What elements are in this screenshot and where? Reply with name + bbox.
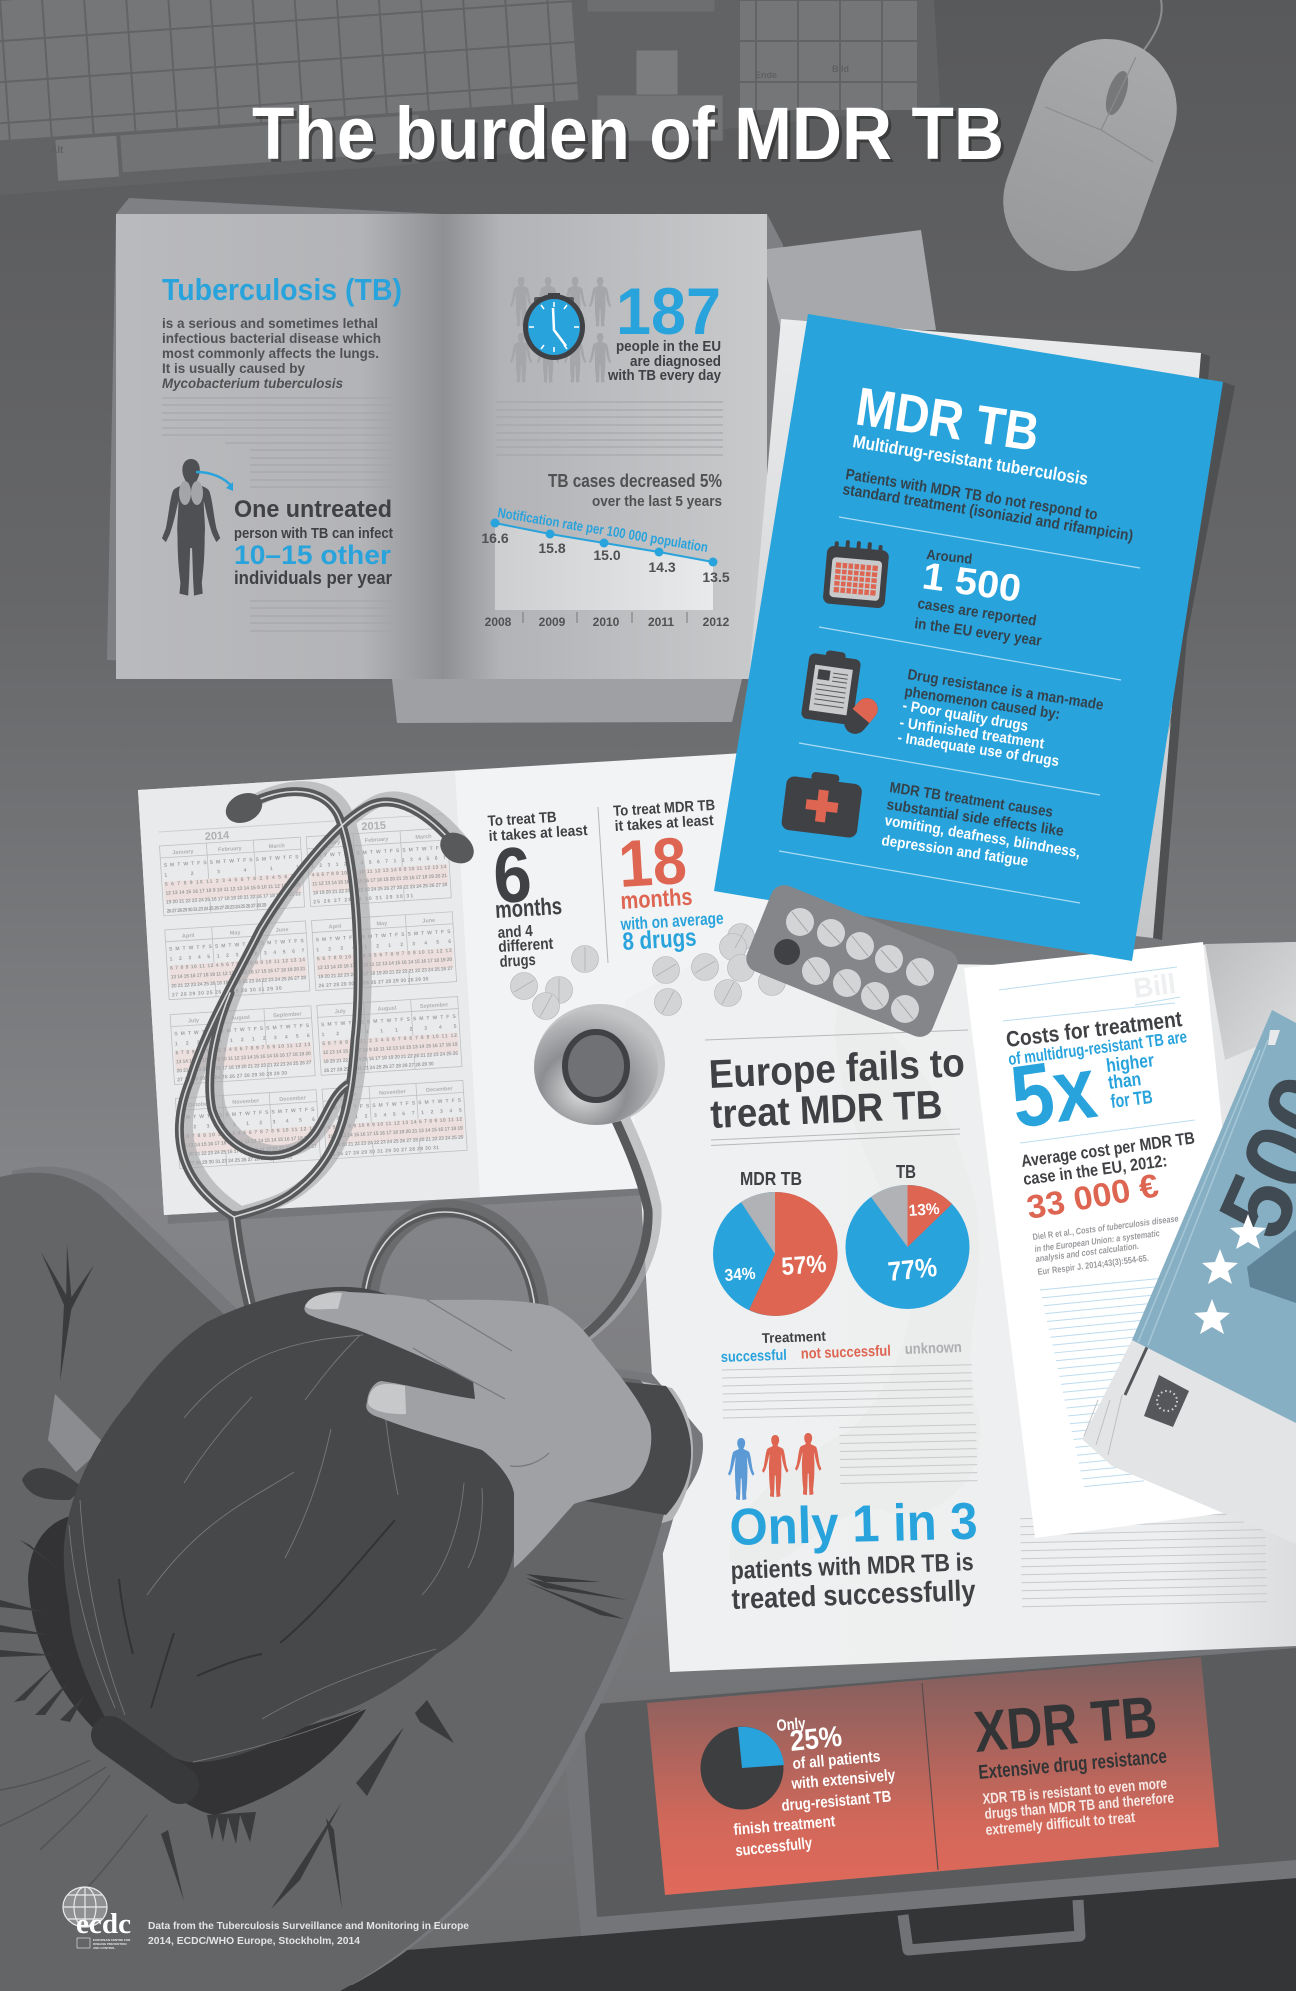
- data source footer: [148, 1920, 469, 1947]
- TB treatment duration: To treat TB: [487, 809, 557, 830]
- calendar 2014 and 2015: 4 5 6 7 8 9 10 8 9 10 11 12 13 14 8 9 10 11 12 13 14: [311, 864, 447, 878]
- pie chart: TB outcomes: 77%: [886, 1252, 938, 1287]
- pie chart: MDR TB outcomes: 34%: [724, 1264, 756, 1285]
- calendar 2014 and 2015: October: [335, 1092, 357, 1099]
- calendar 2014 and 2015: 26 27 28 29 30 31 23 24 25 26 27 28 23 24 25 26 27 28 29: [166, 902, 267, 915]
- 1 500 cases: Around: [926, 546, 973, 567]
- average cost: 33 000 €: [1024, 1166, 1161, 1226]
- one untreated callout: One untreated: [234, 496, 392, 523]
- euro banknotes: [1082, 1010, 1296, 1544]
- ECDC logo: ecdc: [76, 1909, 131, 1940]
- pie legend: Treatment: [762, 1328, 826, 1346]
- calendar 2014 and 2015: 4 5 6 7 8 9 10 8 9 10 11 12 13 14 6 7 8 9 10 11 12: [327, 1117, 463, 1131]
- calendar 2014 and 2015: 26 27 28 29 30 24 25 26 27 28 29 30 28 29 30: [318, 976, 429, 989]
- calendar 2014 and 2015: 19 20 21 22 23 24 25 17 18 19 20 21 22 23 21 22 23 24 25 26 27: [318, 966, 453, 980]
- sleeve cuff: [574, 1381, 691, 1515]
- person leaning over desk: [0, 1167, 703, 1991]
- calendar 2014 and 2015: S M T W T F S S M T W T F S S M T W T F S: [326, 1098, 462, 1112]
- icon: clipboard and pill: [801, 648, 882, 738]
- fingernails: [305, 1293, 406, 1414]
- data source footer: 2014, ECDC/WHO Europe, Stockholm, 2014: [148, 1935, 360, 1947]
- calendar 2014 and 2015: December: [426, 1086, 454, 1094]
- keyboard: [0, 0, 940, 195]
- calendar 2014 and 2015: April: [182, 933, 195, 940]
- XDR description: [982, 1775, 1175, 1839]
- pie chart: TB outcomes: TB: [896, 1162, 916, 1182]
- calendar 2014 and 2015: 20 21 22 23 24 25 26 17 18 19 20 21 22 23 21 22 23 24 25 26 27: [176, 1060, 312, 1074]
- 1 500 cases: in the EU every year: [913, 615, 1043, 650]
- calendar 2014 and 2015: 5 6 7 8 9 10 11 2 3 4 5 6 7 8 2 3 4 5 6 7 8: [165, 873, 300, 888]
- XDR 25 percent text: finish treatment: [733, 1813, 837, 1839]
- calendar 2014 and 2015: November: [379, 1089, 407, 1097]
- line chart: notification rate: 15.0: [593, 547, 621, 563]
- people icons: [510, 277, 611, 383]
- panel: XDR TB: [647, 1657, 1219, 1895]
- XDR 25 percent text: 25%: [788, 1721, 844, 1758]
- ECDC logo: EUROPEAN CENTRE FOR: [93, 1938, 131, 1942]
- calendar 2014 and 2015: 19 20 21 22 23 24 25 16 17 18 19 20 21 22 21 22 23 24 25 26 27: [182, 1144, 317, 1158]
- MDR TB treatment duration: To treat MDR TB: [613, 797, 716, 820]
- TB cases decreased heading: over the last 5 years: [592, 493, 722, 510]
- logo globe: [63, 1887, 107, 1927]
- side effects: vomiting, deafness, blindness,: [883, 812, 1081, 861]
- calendar 2014 and 2015: 25 26 27 28 29 30 31 29 30 31: [313, 893, 414, 905]
- costs heading: Costs for treatment: [1005, 1006, 1184, 1052]
- calendar 2014 and 2015: 1 2 3 1 2 3 4 5 6 7 1 2 3 4 5: [327, 1108, 462, 1122]
- keyboard: Alt: [50, 145, 64, 156]
- line chart: notification rate: 2011: [648, 615, 674, 629]
- icon: loose pills: [510, 924, 786, 1020]
- drug resistance causes: - Inadequate use of drugs: [896, 729, 1060, 770]
- calendar 2014 and 2015: March: [268, 843, 286, 850]
- tuberculosis description: [162, 315, 381, 391]
- pie legend: unknown: [905, 1339, 962, 1358]
- calendar 2014 and 2015: 5 6 7 8 9 10 11 2 3 4 5 6 7 8 7 8 9 10 11 12 13: [181, 1126, 316, 1140]
- calendar 2014 and 2015: June: [275, 927, 289, 934]
- data source footer: Data from the Tuberculosis Surveillance and Monitoring in Europe: [148, 1920, 469, 1932]
- tuberculosis description: Mycobacterium tuberculosis: [162, 375, 343, 391]
- ECDC logo: [63, 1887, 131, 1950]
- calendar 2014 and 2015: October: [188, 1101, 210, 1109]
- calendar 2014 and 2015: September: [273, 1011, 303, 1019]
- panel: costs bill: Bill: [1132, 968, 1177, 1004]
- MDR TB treatment duration: [613, 797, 724, 956]
- calendar 2014 and 2015: August: [378, 1005, 397, 1013]
- XDR subtitle: Extensive drug resistance: [978, 1746, 1168, 1784]
- TB treatment duration: different: [498, 936, 554, 956]
- pie chart: MDR TB outcomes: 57%: [780, 1250, 827, 1281]
- calendar 2014 and 2015: 6 7 8 9 10 11 12 4 5 6 7 8 9 10 8 9 10 11 12 13 14: [170, 957, 305, 972]
- 187 statistic: [607, 274, 722, 384]
- computer mouse: [984, 0, 1196, 291]
- XDR 25 percent text: [733, 1716, 896, 1860]
- side effects: depression and fatigue: [880, 832, 1029, 870]
- citation: in the European Union: a systematic: [1034, 1228, 1160, 1254]
- keyboard: Ende: [755, 70, 777, 80]
- tuberculosis description: most commonly affects the lungs.: [162, 345, 379, 361]
- pie chart: TB outcomes: 13%: [908, 1201, 940, 1220]
- calendar 2014 and 2015: June: [422, 918, 435, 925]
- calendar 2014 and 2015: May: [376, 921, 388, 928]
- calendar 2014 and 2015: 5 6 7 8 9 10 11 3 4 5 6 7 8 9 7 8 9 10 11 12 13: [317, 948, 452, 962]
- calendar 2014 and 2015: 19 20 21 22 23 24 25 16 17 18 19 20 21 22 20 21 22 23 24 25 26: [323, 1051, 459, 1065]
- line chart: notification rate: 2010: [593, 615, 620, 629]
- calendar 2014 and 2015: November: [232, 1098, 260, 1106]
- calendar 2014 and 2015: April: [328, 924, 342, 931]
- XDR description: XDR TB is resistant to even more: [982, 1775, 1168, 1808]
- drug resistance causes: Drug resistance is a man-made: [906, 666, 1105, 714]
- calendar 2014 and 2015: S M T W T F S S M T W T F S S M T W T F S: [169, 938, 305, 953]
- only 1 in 3 callout: patients with MDR TB is: [730, 1548, 974, 1585]
- TB cases decreased heading: [548, 471, 722, 510]
- MDR description: standard treatment (isoniazid and rifampicin): [841, 481, 1134, 545]
- calendar 2014 and 2015: S M T W T F S S M T W T F S S M T W T F S: [164, 854, 299, 869]
- average cost: case in the EU, 2012:: [1022, 1151, 1168, 1189]
- Europe heading: treat MDR TB: [709, 1083, 943, 1137]
- pie chart: 25% finish treatment: [700, 1726, 784, 1810]
- calendar 2014 and 2015: S M T W T F S S M T W T F S S M T W T F S: [321, 1014, 457, 1028]
- average cost: Average cost per MDR TB: [1020, 1128, 1196, 1171]
- keyboard: Bild: [832, 64, 849, 74]
- line chart: notification rate: 2012: [703, 615, 730, 629]
- 187 statistic: with TB every day: [607, 367, 722, 384]
- line chart: notification rate: 13.5: [702, 569, 730, 585]
- average cost: [1020, 1128, 1196, 1226]
- calendar 2014 and 2015: 12 13 14 15 16 17 18 9 10 11 12 13 14 15 9 10 11 12 13 14 15: [165, 882, 301, 897]
- tuberculosis description: It is usually caused by: [162, 360, 305, 376]
- XDR description: drugs than MDR TB and therefore: [984, 1789, 1175, 1823]
- calendar 2014 and 2015: 11 12 13 14 15 16 17 15 16 17 18 19 20 21 15 16 17 18 19 20 21: [312, 873, 447, 887]
- only 1 in 3 callout: treated successfully: [731, 1575, 976, 1616]
- calendar 2014 and 2015: [159, 814, 467, 1168]
- calendar 2014 and 2015: 25 26 27 28 29 30 31 29 30 27 28 29 30 31: [329, 1145, 439, 1158]
- white sheet under MDR sheet: [730, 319, 1210, 940]
- icon: calendar: [823, 540, 890, 609]
- XDR TB heading: XDR TB: [971, 1684, 1159, 1765]
- calendar 2014 and 2015: 1 2 3 4 1 1: [164, 864, 300, 879]
- tuberculosis description: infectious bacterial disease which: [162, 330, 381, 346]
- MDR TB treatment duration: 8 drugs: [622, 924, 697, 956]
- euro stars: [1194, 1214, 1266, 1334]
- line chart: notification rate: 16.6: [481, 530, 509, 546]
- hair: head from above: [28, 1515, 367, 1815]
- TB treatment duration: drugs: [499, 952, 536, 971]
- icon: three people, one successful: [728, 1433, 821, 1500]
- calendar 2014 and 2015: August: [231, 1015, 250, 1022]
- TB cases decreased heading: TB cases decreased 5%: [548, 471, 722, 491]
- 187 statistic: people in the EU: [616, 338, 721, 355]
- 5x statistic: than: [1107, 1069, 1142, 1094]
- calendar 2014 and 2015: 1 2 3 4 1 1 2 3 4 5: [322, 1024, 457, 1038]
- hand on head: [304, 1291, 651, 1568]
- only 1 in 3 callout: [729, 1493, 978, 1616]
- drug resistance causes: [896, 666, 1105, 770]
- calendar 2014 and 2015: 26 27 28 29 30 31 23 24 25 26 27 28 29 27 28 29 30: [324, 1061, 434, 1074]
- calendar 2014 and 2015: 1 2 3 1 2 3 4 5 6 7 1 2 3 4 5 6 7: [311, 855, 446, 870]
- calendar 2014 and 2015: 13 14 15 16 17 18 19 11 12 13 14 15 16 17 15 16 17 18 19 20 21: [171, 966, 306, 981]
- pie legend: [721, 1328, 962, 1366]
- loose hair strands and wrinkles: [0, 1244, 627, 1909]
- MDR TB treatment duration: 18: [616, 823, 689, 901]
- line chart: notification rate: 2009: [539, 615, 566, 629]
- line chart: notification rate: 2008: [485, 615, 512, 629]
- calendar 2014 and 2015: March: [415, 834, 432, 841]
- MDR description: Patients with MDR TB do not respond to: [844, 466, 1099, 524]
- calendar 2014 and 2015: January: [172, 849, 195, 856]
- TB treatment duration: and 4: [497, 923, 533, 942]
- MDR heading: Multidrug-resistant tuberculosis: [851, 431, 1089, 489]
- calendar 2014 and 2015: July: [335, 1009, 347, 1015]
- 1 500 cases: 1 500: [920, 555, 1024, 611]
- MDR TB treatment duration: months: [620, 884, 693, 915]
- stethoscope: [179, 787, 665, 1340]
- main title: The burden of MDR TB: [255, 95, 1007, 178]
- citation: Eur Respir J. 2014;43(3):554-65.: [1037, 1253, 1149, 1277]
- calendar 2014 and 2015: 1 2 3 4 1 1 2 3 4 5 6: [180, 1117, 315, 1131]
- 1 500 cases: cases are reported: [916, 595, 1038, 630]
- calendar 2014 and 2015: 18 19 20 21 22 23 24 22 23 24 25 26 27 28 20 21 22 23 24 25 26: [328, 1134, 464, 1149]
- icon: blister pack: [742, 881, 962, 1041]
- TB treatment duration: [487, 809, 588, 971]
- calendar 2014 and 2015: 5 6 7 8 9 10 11 2 3 4 5 6 7 8 6 7 8 9 10 11 12: [322, 1033, 457, 1047]
- icon: EU flag: [1144, 1375, 1189, 1427]
- calendar 2014 and 2015: 2015: [361, 820, 386, 833]
- calendar 2014 and 2015: February: [218, 846, 243, 853]
- costs heading: of multidrug-resistant TB are: [1007, 1027, 1188, 1069]
- TB treatment duration: 6: [491, 830, 534, 920]
- 5x statistic: 5x: [1005, 1037, 1102, 1147]
- drug resistance causes: phenomenon caused by:: [903, 683, 1061, 723]
- citation: analysis and cost calculation.: [1035, 1241, 1139, 1264]
- calendar 2014 and 2015: 27 28 29 30 31 24 25 26 27 28 29 30 28 29 30: [177, 1070, 287, 1083]
- calendar 2014 and 2015: 2014: [204, 830, 230, 843]
- calendar 2014 and 2015: December: [279, 1095, 307, 1103]
- drug resistance causes: - Unfinished treatment: [898, 714, 1045, 753]
- pie chart: MDR TB outcomes: MDR TB: [740, 1169, 802, 1189]
- calendar 2014 and 2015: 12 13 14 15 16 17 18 10 11 12 13 14 15 16 14 15 16 17 18 19 20: [317, 957, 453, 971]
- drug resistance causes: - Poor quality drugs: [901, 697, 1029, 735]
- XDR 25 percent text: drug-resistant TB: [781, 1788, 892, 1815]
- 1 500 cases: [913, 546, 1043, 650]
- panel: costs bill: [964, 942, 1262, 1538]
- calendar 2014 and 2015: 11 12 13 14 15 16 17 15 16 17 18 19 20 21 13 14 15 16 17 18 19: [328, 1126, 463, 1140]
- pie legend: successful: [721, 1347, 787, 1366]
- calendar 2014 and 2015: February: [365, 837, 389, 844]
- XDR 25 percent text: of all patients: [792, 1748, 881, 1773]
- calendar 2014 and 2015: 12 13 14 15 16 17 18 9 10 11 12 13 14 15 13 14 15 16 17 18 19: [323, 1042, 458, 1056]
- one untreated callout: person with TB can infect: [234, 525, 393, 542]
- calendar 2014 and 2015: S M T W T F S S M T W T F S S M T W T F S: [179, 1107, 315, 1121]
- panel: MDR TB sheet: [714, 314, 1235, 961]
- 5x statistic: for TB: [1110, 1087, 1154, 1113]
- TB treatment duration: months: [494, 893, 563, 924]
- line chart: notification rate: Notification rate per 100 000 population: [497, 504, 709, 555]
- icon: medical kit: [781, 769, 864, 838]
- ECDC logo: AND CONTROL: [93, 1946, 115, 1950]
- side effects: [880, 779, 1081, 870]
- 187 statistic: are diagnosed: [630, 353, 721, 370]
- XDR 25 percent text: successfully: [735, 1835, 813, 1860]
- calendar 2014 and 2015: 1 2 3 4 5 1 2 3 1 2 3 4 5 6 7: [169, 948, 305, 963]
- tuberculosis heading: Tuberculosis (TB): [162, 272, 402, 307]
- line chart: notification rate: 15.8: [538, 540, 566, 556]
- calendar 2014 and 2015: July: [188, 1018, 200, 1025]
- pie chart: TB outcomes: [846, 1162, 970, 1309]
- calendar 2014 and 2015: 26 27 28 29 30 31 23 24 25 26 27 28 29 28 29 30 31: [182, 1154, 293, 1167]
- TB treatment duration: it takes at least: [488, 822, 588, 845]
- tuberculosis description: is a serious and sometimes lethal: [162, 315, 378, 331]
- pie legend: not successful: [801, 1342, 891, 1363]
- calendar 2014 and 2015: 6 7 8 9 10 11 12 3 4 5 6 7 8 9 7 8 9 10 11 12 13: [175, 1042, 311, 1056]
- costs heading: [1005, 1006, 1188, 1069]
- calendar 2014 and 2015: September: [420, 1002, 449, 1010]
- body and arm: [0, 1173, 691, 1991]
- faint map of Europe: [729, 1000, 981, 1569]
- line chart: notification rate: 14.3: [648, 559, 676, 575]
- icon: body with lungs and arrow: [162, 459, 233, 596]
- calendar 2014 and 2015: 1 2 3 4 5 1 2 1 2 3 4 5 6: [175, 1033, 310, 1047]
- MDR TB treatment duration: it takes at least: [614, 812, 714, 835]
- citation: Diel R et al., Costs of tuberculosis disease: [1032, 1213, 1179, 1242]
- main title: The burden of MDR TB: [252, 92, 1004, 175]
- calendar 2014 and 2015: S M T W T F S S M T W T F S S M T W T F S: [316, 929, 451, 943]
- line chart: notification rate: [481, 504, 730, 629]
- calendar 2014 and 2015: 20 21 22 23 24 25 26 18 19 20 21 22 23 24 22 23 24 25 26 27 28: [171, 975, 306, 990]
- calendar 2014 and 2015: S M T W T F S S M T W T F S S M T W T F S: [174, 1023, 310, 1037]
- MDR TB treatment duration: with on average: [619, 909, 724, 934]
- one untreated callout: individuals per year: [234, 568, 392, 588]
- side effects: substantial side effects like: [885, 796, 1065, 840]
- citation: [1032, 1213, 1179, 1277]
- calendar 2014 and 2015: January: [319, 840, 341, 847]
- only 1 in 3 callout: Only 1 in 3: [729, 1493, 978, 1557]
- XDR 25 percent text: Only: [776, 1716, 806, 1735]
- panel: treatment duration calendar spread: [138, 752, 795, 1224]
- calendar 2014 and 2015: S M T W T F S S M T W T F S S M T W T F S: [310, 845, 446, 860]
- 187 statistic: 187: [616, 274, 721, 348]
- hair tie: [110, 1735, 180, 1785]
- calendar 2014 and 2015: 13 14 15 16 17 18 19 10 11 12 13 14 15 16 14 15 16 17 18 19 20: [176, 1051, 311, 1065]
- ECDC logo: DISEASE PREVENTION: [93, 1942, 127, 1946]
- MDR heading: MDR TB: [852, 377, 1043, 463]
- Europe heading: Europe fails to: [708, 1041, 966, 1097]
- pie chart: MDR TB outcomes: [713, 1169, 838, 1316]
- calendar 2014 and 2015: 18 19 20 21 22 23 24 22 23 24 25 26 27 28 22 23 24 25 26 27 28: [313, 882, 448, 896]
- XDR 25 percent text: with extensively: [790, 1767, 896, 1793]
- briefcase handle: [903, 1900, 1080, 1950]
- side effects: MDR TB treatment causes: [888, 779, 1054, 821]
- panel: open book: [116, 214, 767, 679]
- XDR description: extremely difficult to treat: [985, 1809, 1136, 1839]
- calendar 2014 and 2015: 27 28 29 30 25 26 27 28 29 30 31 29 30: [172, 986, 282, 999]
- briefcase: [0, 1640, 1296, 1991]
- calendar 2014 and 2015: May: [230, 930, 242, 937]
- one untreated callout: 10–15 other: [234, 540, 392, 570]
- one untreated callout: [234, 496, 393, 588]
- Europe heading: [708, 1041, 966, 1137]
- stethoscope chest piece: [534, 1004, 665, 1125]
- panel: Europe fails to treat page: [625, 942, 1296, 1672]
- calendar 2014 and 2015: 1 2 3 4 1 2 1 2 3 4 5 6: [316, 939, 452, 953]
- calendar 2014 and 2015: 12 13 14 15 16 17 18 9 10 11 12 13 14 15 14 15 16 17 18 19 20: [181, 1135, 317, 1149]
- papers behind the book: [107, 198, 936, 723]
- calendar 2014 and 2015: 19 20 21 22 23 24 25 16 17 18 19 20 21 22 16 17 18 19 20 21 22: [166, 891, 301, 906]
- icon: clock: [523, 293, 585, 360]
- 5x statistic: higher: [1105, 1050, 1156, 1077]
